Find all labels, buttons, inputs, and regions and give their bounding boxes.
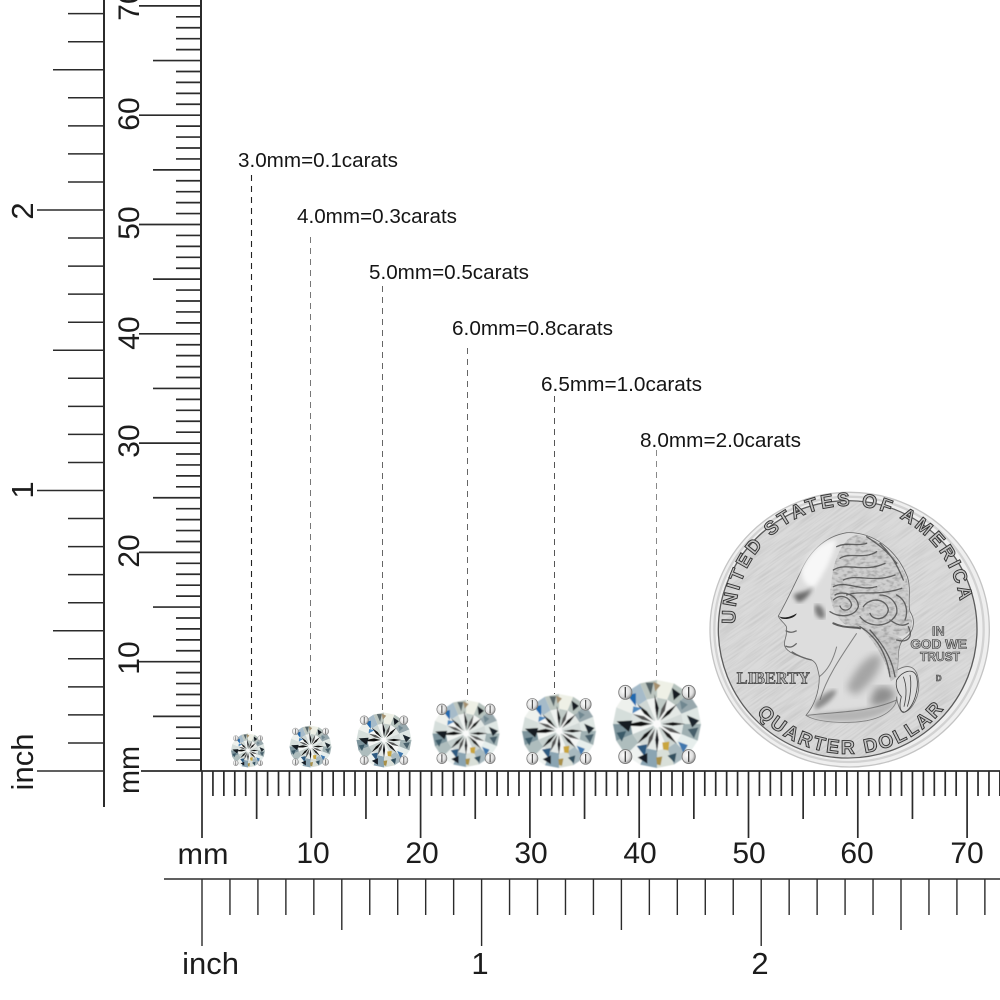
- mm ruler labels: 60: [113, 97, 146, 131]
- diamond 6.0mm: [432, 700, 500, 767]
- hair strands: [830, 537, 910, 677]
- dashed leader lines: [252, 175, 656, 735]
- horizontal mm labels: 50: [732, 837, 766, 870]
- nose and lip shadow: [778, 613, 797, 619]
- quarter dollar coin: [709, 492, 990, 768]
- collar and lapel lines: [807, 633, 897, 715]
- horizontal inch labels: [182, 946, 769, 981]
- carat size labels: 5.0mm=0.5carats: [369, 262, 529, 284]
- carat size labels: 6.0mm=0.8carats: [452, 318, 613, 340]
- ponytail ribbon: [896, 671, 917, 712]
- inch ruler labels: 2: [5, 202, 40, 220]
- bust and head silhouette: [778, 533, 919, 722]
- horizontal mm labels: 70: [950, 837, 984, 870]
- horizontal mm ticks: [202, 771, 1000, 838]
- mm ruler labels: 30: [113, 424, 146, 458]
- diamond 6.5mm: [522, 694, 596, 768]
- diamond 4.0mm: [290, 726, 332, 768]
- coin brushed field: [669, 451, 1000, 808]
- Washington portrait: [778, 533, 919, 722]
- coin motto: In God We Trust: GOD WE: [910, 637, 967, 651]
- mm ruler labels: 10: [113, 641, 146, 675]
- horizontal inch labels: 1: [471, 946, 489, 981]
- coin motto: In God We Trust: D: [936, 674, 942, 683]
- diamond 3.0mm: [231, 734, 265, 768]
- horizontal mm labels: 20: [405, 837, 439, 870]
- mm ruler spine: [200, 0, 202, 771]
- mm ruler ticks: [139, 6, 202, 771]
- inch ruler labels: 1: [5, 481, 40, 499]
- horizontal inch labels: inch: [182, 946, 239, 981]
- horizontal mm labels: 60: [840, 837, 874, 870]
- carat size labels: 3.0mm=0.1carats: [238, 150, 398, 172]
- vertical inch ruler: [5, 0, 104, 807]
- horizontal mm ruler: [178, 771, 1000, 871]
- mm ruler labels: mm: [113, 746, 146, 794]
- carat size labels: 8.0mm=2.0carats: [640, 430, 801, 452]
- inch ruler labels: inch: [5, 734, 40, 790]
- coin motto: In God We Trust: [910, 624, 967, 683]
- horizontal mm labels: 10: [296, 837, 330, 870]
- vertical mm ruler: [113, 0, 202, 794]
- inch ruler labels: [5, 202, 40, 790]
- coin rim: [710, 492, 989, 767]
- horizontal inch labels: 2: [751, 946, 769, 981]
- horizontal mm labels: 30: [514, 837, 548, 870]
- coin inscription: Quarter Dollar: QUARTER DOLLAR: [758, 702, 944, 754]
- mm ruler labels: 20: [113, 534, 146, 568]
- inch ruler ticks: [37, 14, 104, 771]
- hair texture: [830, 535, 912, 637]
- carat size labels: 4.0mm=0.3carats: [297, 206, 457, 228]
- coin motto: In God We Trust: TRUST: [920, 650, 960, 664]
- coat shading: [847, 655, 881, 695]
- coin inscription: Liberty: LIBERTY: [737, 668, 810, 687]
- inch ruler spine: [103, 0, 105, 807]
- coat lower shading: [869, 686, 895, 706]
- pigtail texture: [860, 627, 902, 682]
- coin inscription: United States of America: UNITED STATES OF AMERICA: [722, 492, 972, 624]
- diamond 8.0mm: [613, 680, 701, 768]
- horizontal mm labels: mm: [178, 838, 228, 871]
- horizontal mm labels: 40: [623, 837, 657, 870]
- horizontal mm labels: [178, 837, 984, 871]
- forehead highlight: [802, 540, 837, 587]
- mm ruler labels: 40: [113, 316, 146, 350]
- carat size labels: 6.5mm=1.0carats: [541, 374, 702, 396]
- horizontal inch ruler: [164, 879, 1000, 981]
- coin motto: In God We Trust: IN: [932, 624, 945, 638]
- cheek and brow shading: [815, 605, 825, 619]
- carat size labels: [238, 150, 801, 452]
- mm ruler labels: [113, 0, 146, 794]
- diamond 5.0mm: [356, 712, 412, 768]
- mm ruler labels: 50: [113, 206, 146, 240]
- horizontal inch ticks: [164, 879, 1000, 946]
